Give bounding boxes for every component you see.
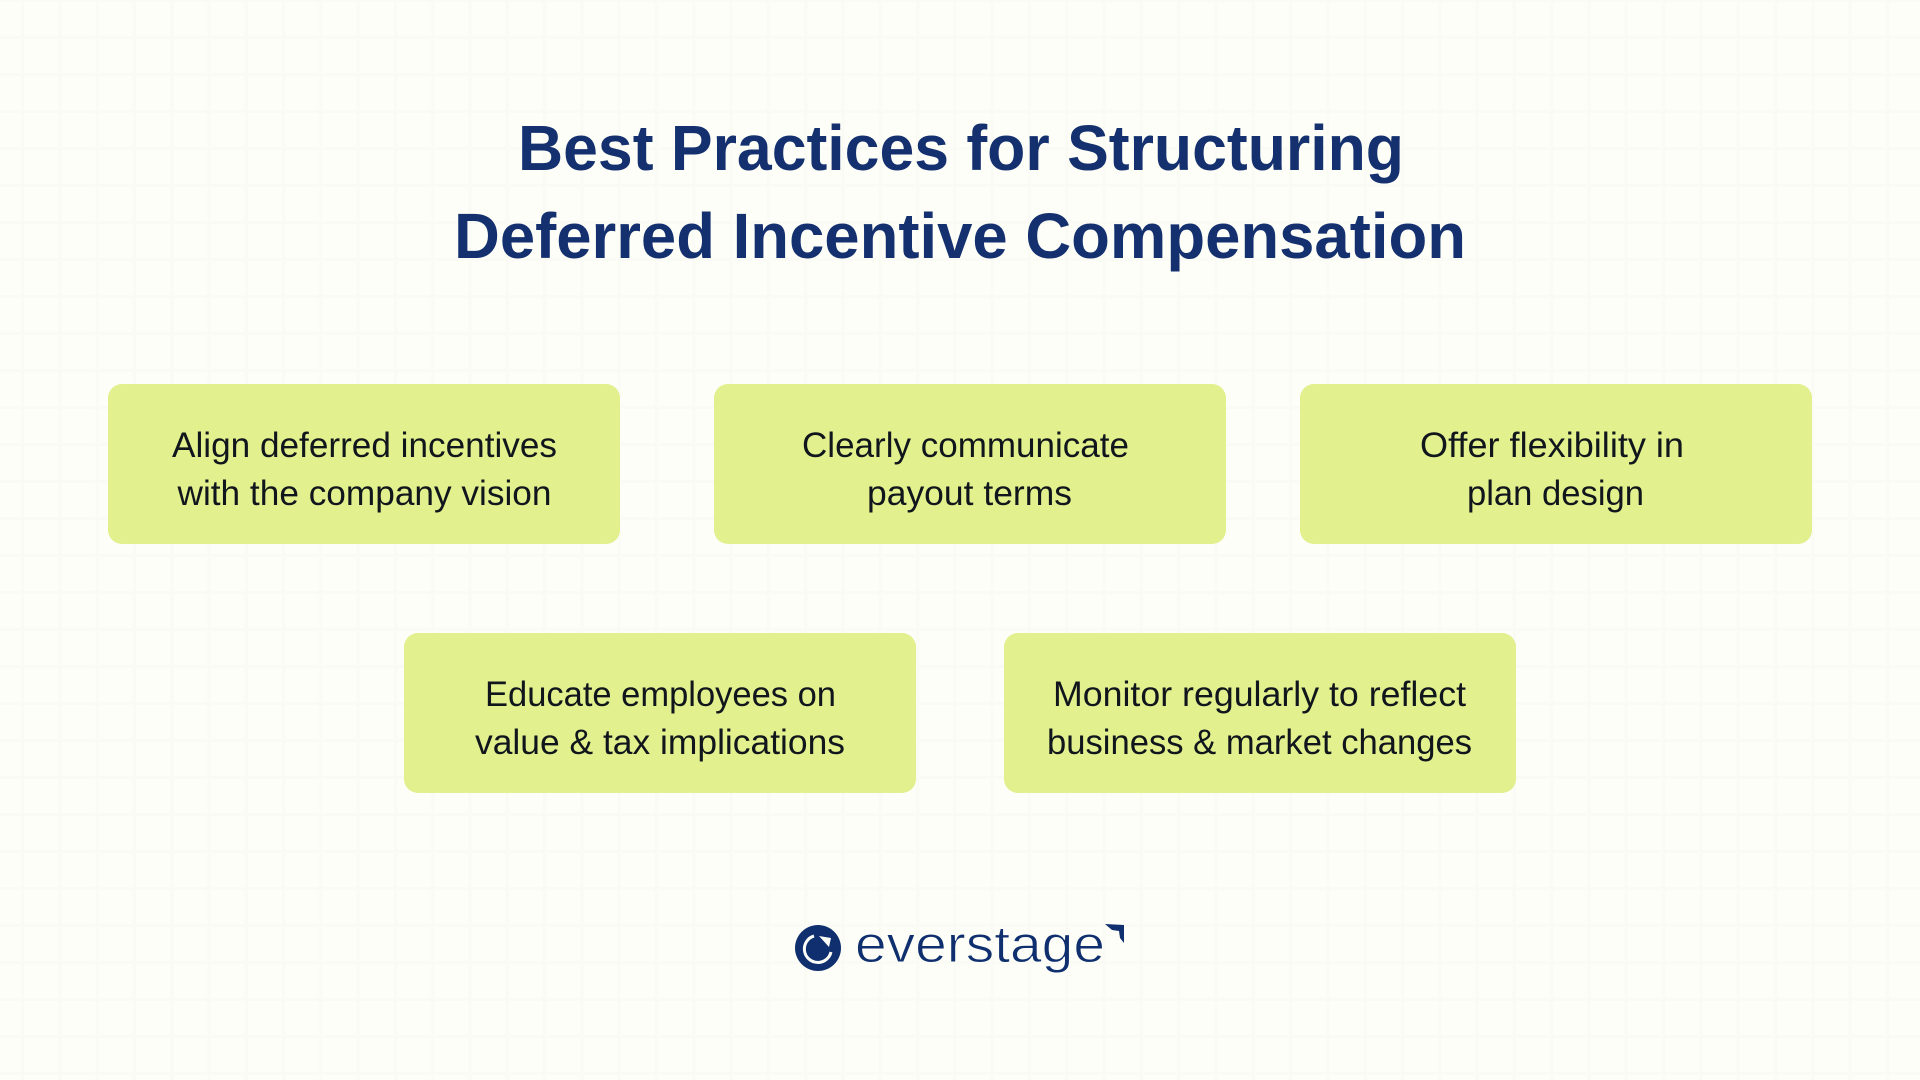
card: communicate payout terms: payout terms xyxy=(867,474,1072,513)
card: monitor regularly xyxy=(1004,633,1516,793)
logo: everstage xyxy=(795,916,1124,974)
card: educate employees xyxy=(404,633,916,793)
card: educate employees: Educate employees on xyxy=(485,675,836,714)
icon: corner bracket xyxy=(1105,924,1124,943)
icon: logo mark xyxy=(795,925,841,971)
title: Best Practices for Structuring xyxy=(518,112,1404,184)
card: flexibility xyxy=(1300,384,1812,544)
card: educate employees: value & tax implications xyxy=(475,723,845,762)
title: Deferred Incentive Compensation xyxy=(454,200,1466,272)
wordmark: everstage xyxy=(855,916,1105,974)
card: monitor regularly: Monitor regularly to reflect xyxy=(1053,675,1466,714)
title xyxy=(454,112,1466,272)
card: align incentives: with the company vision xyxy=(176,474,552,513)
card: monitor regularly: business & market changes xyxy=(1047,723,1472,762)
card: align incentives xyxy=(108,384,620,544)
card: align incentives: Align deferred incentives xyxy=(172,426,557,465)
card: flexibility: Offer flexibility in xyxy=(1420,426,1684,465)
card: communicate payout terms: Clearly communicate xyxy=(802,426,1129,465)
card: communicate payout terms xyxy=(714,384,1226,544)
card: flexibility: plan design xyxy=(1467,474,1644,513)
